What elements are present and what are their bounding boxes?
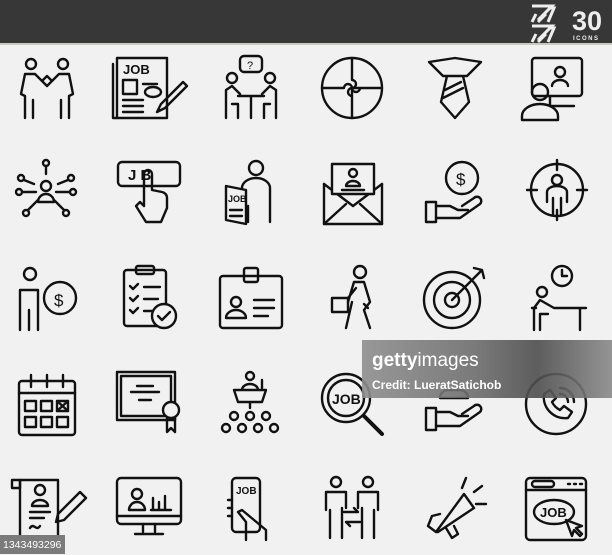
icon: puzzle circle — [322, 58, 382, 118]
logo badge: 30 icons: ICONS — [573, 36, 600, 42]
icon: person dollar — [20, 268, 76, 330]
icon: hand dollar — [426, 162, 481, 222]
icon: necktie — [429, 58, 481, 118]
watermark box — [362, 340, 612, 398]
icon: job magnifier — [322, 374, 382, 434]
icon: job newspaper: JOB — [123, 62, 150, 77]
icon: walking businessman — [332, 266, 370, 328]
logo badge: 30 icons — [532, 6, 602, 42]
icon: job button press: J B — [128, 167, 152, 184]
icon: person holding job sign: JOB — [228, 194, 247, 204]
image id label — [0, 535, 65, 554]
icon: network person — [16, 160, 76, 216]
icon: speaker audience — [222, 372, 278, 432]
icon: hand dollar: $ — [456, 170, 466, 189]
watermark box: gettyimages — [372, 350, 479, 371]
icon: two people exchange — [326, 477, 378, 538]
icon: interview — [226, 56, 276, 118]
header bar — [0, 0, 612, 45]
icon: job magnifier: JOB — [332, 391, 361, 407]
image id label: 1343493296 — [3, 539, 62, 551]
watermark box: Credit: LueratSatichob — [372, 378, 501, 392]
icon: calendar — [19, 375, 75, 435]
icon: hand service (partially hidden) — [426, 390, 481, 430]
icon: video call — [522, 58, 582, 120]
icon: interview: ? — [247, 60, 253, 72]
icon: person holding job sign — [226, 161, 270, 224]
icon: monitor analytics — [117, 478, 181, 534]
icon: person dollar: $ — [54, 291, 64, 310]
icon: megaphone — [428, 478, 486, 538]
icon: target person — [527, 160, 587, 220]
icon: resume signing — [12, 480, 86, 538]
icon: job newspaper — [113, 58, 187, 118]
icon: person at desk clock — [532, 266, 586, 330]
icon: job button press — [118, 162, 180, 222]
icon: browser job: JOB — [540, 505, 567, 520]
logo badge: 30 icons: 30 — [572, 6, 602, 36]
icon: handshake people — [21, 59, 73, 118]
icon: id card — [220, 268, 282, 328]
icon: browser job — [526, 478, 586, 540]
icon: phone job hand: JOB — [236, 486, 257, 497]
icon: phone job hand — [228, 478, 266, 540]
icon: phone circle — [526, 374, 586, 434]
icon: certificate — [117, 372, 179, 432]
icon: checklist — [124, 266, 176, 328]
icon: dart target — [424, 268, 484, 328]
icon: envelope letter — [324, 164, 382, 224]
